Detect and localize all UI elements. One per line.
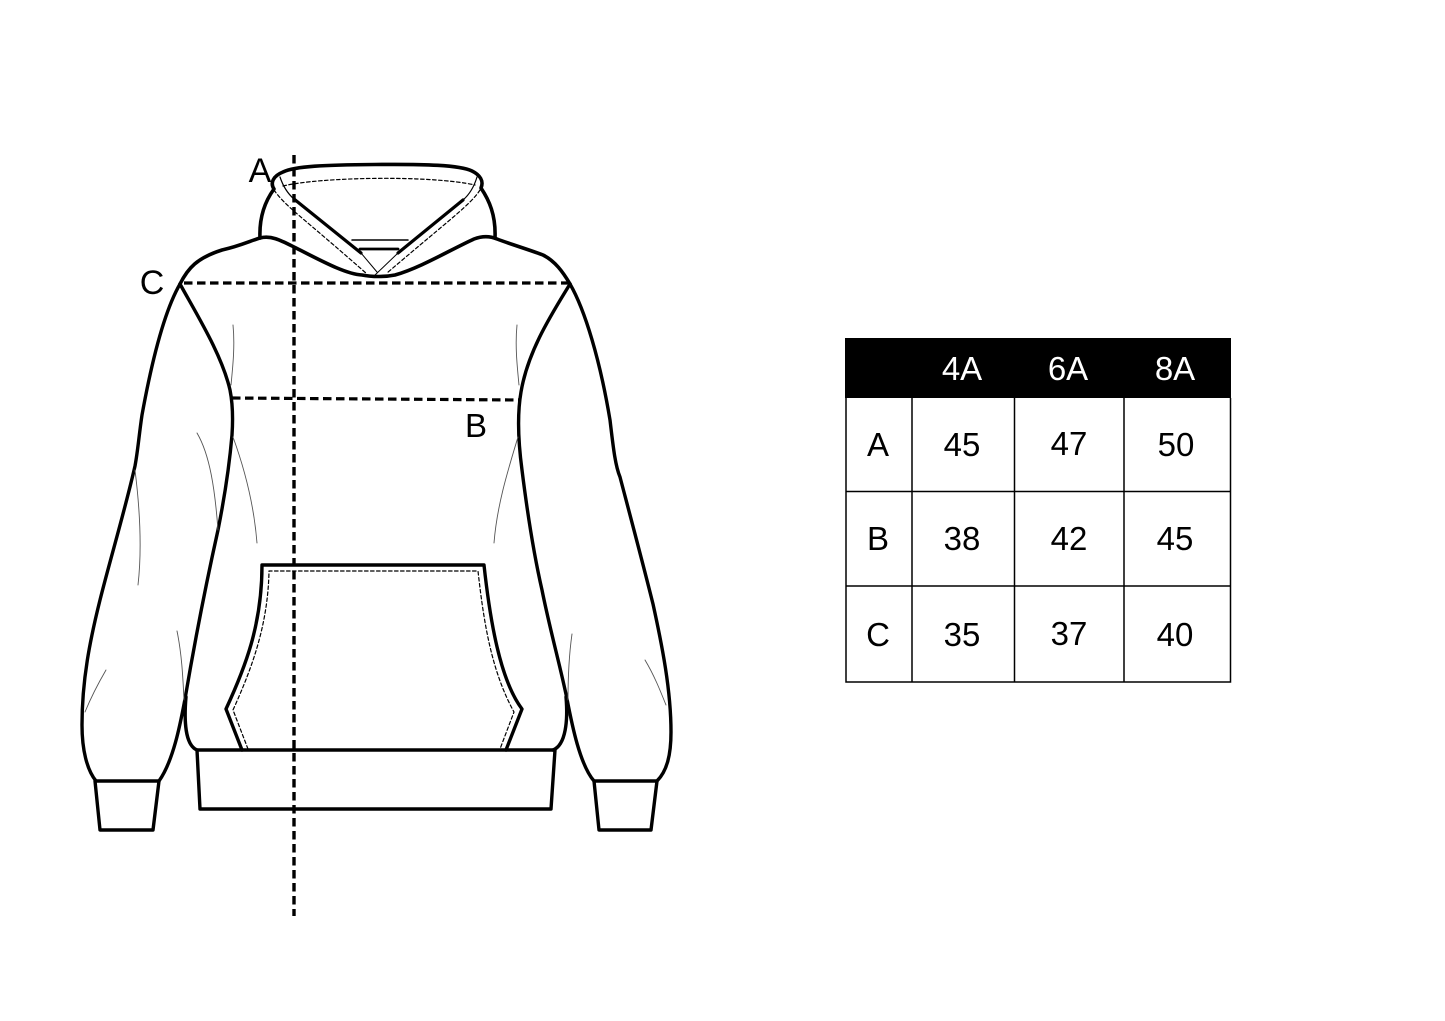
row B [867, 520, 1193, 557]
right sleeve [518, 284, 671, 781]
row A: 50 [1158, 426, 1194, 463]
header labels [942, 350, 1195, 387]
left cuff [95, 781, 159, 830]
row B: 45 [1157, 520, 1193, 557]
kangaroo pocket [226, 565, 522, 750]
right cuff [594, 781, 657, 830]
row A [867, 425, 1194, 463]
hood outline [260, 164, 495, 238]
table grid [846, 398, 1230, 682]
left sleeve [82, 284, 233, 781]
size table [845, 338, 1231, 682]
measurement line: B waist width [232, 398, 520, 400]
row C: 37 [1051, 615, 1087, 652]
hood stitching [274, 178, 480, 274]
row B: B [867, 520, 889, 557]
body sides [185, 697, 567, 750]
row C [866, 615, 1193, 653]
header labels: 8A [1155, 350, 1195, 387]
measurement line: C chest width [184, 281, 568, 285]
header labels: 4A [942, 350, 982, 387]
label A: A [249, 152, 272, 190]
row B: 38 [944, 520, 980, 557]
hoodie technical drawing [82, 164, 671, 830]
row B: 42 [1051, 520, 1087, 557]
row C: C [866, 616, 890, 653]
row C: 35 [944, 616, 980, 653]
measurement line: vertical length [292, 155, 296, 916]
row A: A [867, 426, 889, 463]
pocket stitching [233, 571, 514, 749]
inner collar [352, 240, 408, 249]
hood lapels [280, 177, 477, 276]
label C: C [140, 264, 164, 302]
row A: 47 [1051, 425, 1087, 462]
neckline and shoulders [180, 237, 570, 284]
label B: B [465, 407, 487, 444]
table header bar [845, 338, 1231, 398]
waistband [197, 750, 555, 809]
header labels: 6A [1048, 350, 1088, 387]
row A: 45 [944, 426, 980, 463]
fold lines [85, 325, 666, 712]
row C: 40 [1157, 616, 1193, 653]
